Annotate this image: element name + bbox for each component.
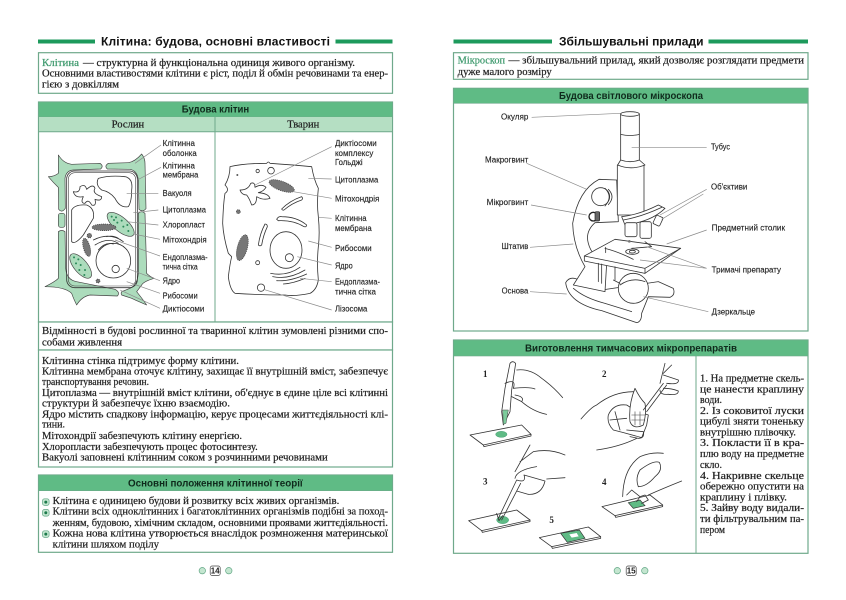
diagram: animal cell: Ендоплазма- (335, 277, 380, 287)
heading: cell structure: Будова клітин (182, 104, 249, 116)
text block: preparation steps: обережно опустити на (700, 482, 805, 493)
diagram: plant cell: Клітинна (163, 138, 195, 148)
diagram: animal cell: Рибосоми (335, 243, 372, 253)
heading: cell structure (38, 102, 392, 117)
diagram: plant cell: Рибосоми (163, 290, 198, 300)
text block: functions of organelles: структури й забезпечує їхню взаємодію. (42, 398, 230, 409)
panel: cell theory: Клітини всіх одноклітинних і багатоклітинних організмів подібні за поход- (53, 507, 388, 518)
text block: preparation steps: цибулі зняти тоненьку (700, 417, 804, 428)
text block: preparation steps: води. (700, 395, 722, 406)
text block: preparation steps: ти фільтрувальним па- (700, 514, 804, 525)
diagram: animal cell: тична сітка (335, 287, 376, 297)
text block: preparation steps: 4. Накривне скельце (700, 471, 805, 482)
definition box: microscope: Мікроскоп (458, 56, 506, 67)
diagram: microscope: Макрогвинт (485, 154, 528, 164)
page number: 14 (199, 566, 232, 576)
text block: differences between cells: собами живлення (42, 337, 122, 348)
heading: cell theory: Основні положення клітинної теорії (128, 478, 304, 490)
step 4: lowering cover slip (602, 453, 682, 517)
diagram: plant cell: Ядро (163, 275, 180, 285)
text block: functions of organelles: Клітинна мембрана оточує клітину, захищає її внутрішній вміст, забезпечує (42, 366, 389, 378)
diagram: microscope: Основа (502, 285, 528, 295)
diagram: animal cell: Гольджі (335, 157, 363, 167)
bullet icons (42, 499, 49, 537)
diagram: animal cell (223, 138, 380, 314)
diagram: plant cell: мембрана (163, 170, 198, 180)
title: right page: Збільшувальні прилади (559, 34, 704, 48)
diagram: plant cell: Диктіосоми (163, 304, 204, 314)
panel: cell theory (38, 475, 392, 552)
step 4: lowering cover slip: 4 (602, 477, 607, 487)
definition box: cell: гією з довкіллям (42, 80, 120, 90)
definition box: cell: Основними властивостями клітини є ріст, поділ й обмін речовинами та енер- (42, 68, 388, 80)
diagram: plant cell: Клітинна (163, 160, 195, 170)
step 5: finished slide: 5 (549, 515, 554, 525)
text block: preparation steps: це нанести краплину (700, 384, 804, 395)
text block: functions of organelles: Хлоропласти забезпечують процес фотосинтезу. (42, 442, 258, 453)
text block: preparation steps: внутрішню плівочку. (700, 427, 796, 438)
diagram: animal cell: Лізосома (335, 304, 367, 314)
step 3: needle on slide (469, 445, 565, 532)
diagram: microscope: Предметний столик (712, 223, 785, 233)
step 2: onion scale and tweezers (581, 363, 678, 450)
diagram: microscope: Тубус (711, 141, 731, 151)
step 1: pipette drop on slide: 1 (483, 369, 488, 379)
definition box: microscope: дуже малого розміру (458, 67, 552, 78)
text block: functions of organelles (38, 350, 392, 467)
definition box: microscope (454, 53, 808, 79)
text block: functions of organelles: транспортування речовин. (42, 377, 149, 388)
text block: functions of organelles: Клітинна стінка підтримує форму клітини. (42, 356, 239, 367)
text block: functions of organelles: Ядро містить спадкову інформацію, керує процесами життєдіяльності клі- (42, 409, 388, 420)
text block: differences between cells: Відмінності в будові рослинної та тваринної клітин зумовлені різними спо- (42, 326, 388, 337)
column headers: plant and animal (39, 117, 392, 322)
diagram: animal cell: Цитоплазма (335, 174, 378, 184)
text block: functions of organelles: тини. (42, 420, 65, 430)
diagram: microscope: Дзеркальце (712, 306, 755, 316)
diagram: plant cell: Цитоплазма (163, 204, 206, 214)
panel: cell theory: Клітина є одиницею будови й розвитку всіх живих організмів. (53, 496, 339, 507)
diagram: plant cell: Мітохондрія (163, 235, 207, 245)
diagram: plant cell (45, 138, 208, 314)
panel: cell theory: клітини шляхом поділу (53, 539, 159, 550)
title: right page (454, 34, 808, 48)
definition box: cell (38, 53, 392, 93)
text block: preparation steps: 1. На предметне скель- (700, 374, 804, 385)
diagram: microscope (485, 111, 785, 323)
definition box: microscope: — збільшувальний прилад, який дозволяє розглядати предмети (507, 56, 805, 67)
page number: 15: 15 (627, 567, 636, 576)
definition box: cell: Клітина (42, 58, 80, 69)
step 5: finished slide (539, 515, 601, 548)
text block: preparation steps: пером (700, 525, 726, 536)
step 3: needle on slide: 3 (483, 476, 488, 486)
diagram: animal cell: Диктіосоми (335, 138, 377, 148)
column headers: plant and animal: Тварин (287, 120, 320, 130)
title: left page: Клітина: будова, основні властивості (101, 34, 330, 48)
step 2: onion scale and tweezers: 2 (602, 369, 607, 379)
text block: preparation steps: краплину і плівку. (700, 492, 787, 503)
text block: preparation steps (700, 374, 805, 536)
diagram: plant cell: Вакуоля (163, 188, 192, 198)
title: left page (38, 34, 392, 48)
text block: preparation steps: 3. Покласти її в кра- (700, 438, 804, 449)
panel: cell structure (38, 102, 392, 322)
page number: 14: 14 (211, 567, 220, 576)
diagram: plant cell: Ендоплазма- (163, 252, 208, 262)
diagram: plant cell: Хлоропласт (163, 219, 205, 229)
heading: temporary slide preparation: Виготовлення тимчасових мікропрепаратів (525, 342, 738, 354)
diagram: animal cell: мембрана (335, 223, 372, 233)
column headers: plant and animal: Рослин (112, 120, 145, 130)
definition box: cell: — структурна й функціональна одиниця живого організму. (82, 58, 355, 69)
panel: microscope structure (454, 88, 808, 331)
text block: preparation steps: плю воду на предметне (700, 449, 805, 460)
diagram: microscope: Тримачі препарату (712, 265, 782, 275)
panel: cell theory: Кожна нова клітина утворюється внаслідок розмноження материнської (53, 529, 388, 540)
diagram: microscope: Мікрогвинт (487, 197, 528, 207)
panel: temporary slide preparation (454, 340, 808, 553)
diagram: animal cell: Клітинна (335, 213, 367, 223)
heading: cell theory (38, 475, 392, 491)
step 1: pipette drop on slide (470, 362, 563, 447)
panel: cell theory: женням, будовою, хімічним складом, основними проявами життєдіяльності. (52, 518, 388, 529)
heading: microscope structure (454, 88, 808, 103)
diagram: plant cell: оболонка (163, 148, 197, 158)
diagram: microscope: Об'єктиви (711, 181, 747, 191)
diagram: microscope: Штатив (502, 241, 529, 251)
text block: functions of organelles: Вакуолі заповнені клітинним соком з розчинними речовинами (42, 453, 328, 464)
text block: functions of organelles: Мітохондрії забезпечують клітину енергією. (42, 431, 242, 442)
text block: preparation steps: 5. Зайву воду видали- (700, 503, 804, 514)
text block: functions of organelles: Цитоплазма — внутрішній вміст клітини, об'єднує в єдине ціле всі клітинні (42, 388, 388, 399)
diagram: animal cell: Ядро (335, 260, 353, 270)
heading: microscope structure: Будова світлового мікроскопа (559, 90, 703, 102)
page number: 15 (614, 566, 648, 576)
text block: preparation steps: 2. Із соковитої луски (700, 406, 805, 417)
diagram: plant cell: тична сітка (163, 261, 198, 271)
diagram: microscope: Окуляр (501, 111, 529, 121)
diagram: animal cell: комплексу (335, 148, 374, 158)
illustration: steps 1 to 5 (469, 362, 682, 548)
heading: temporary slide preparation (454, 340, 808, 356)
diagram: animal cell: Мітохондрія (335, 194, 380, 204)
text block: differences between cells (38, 322, 392, 350)
text block: preparation steps: скло. (700, 460, 722, 471)
